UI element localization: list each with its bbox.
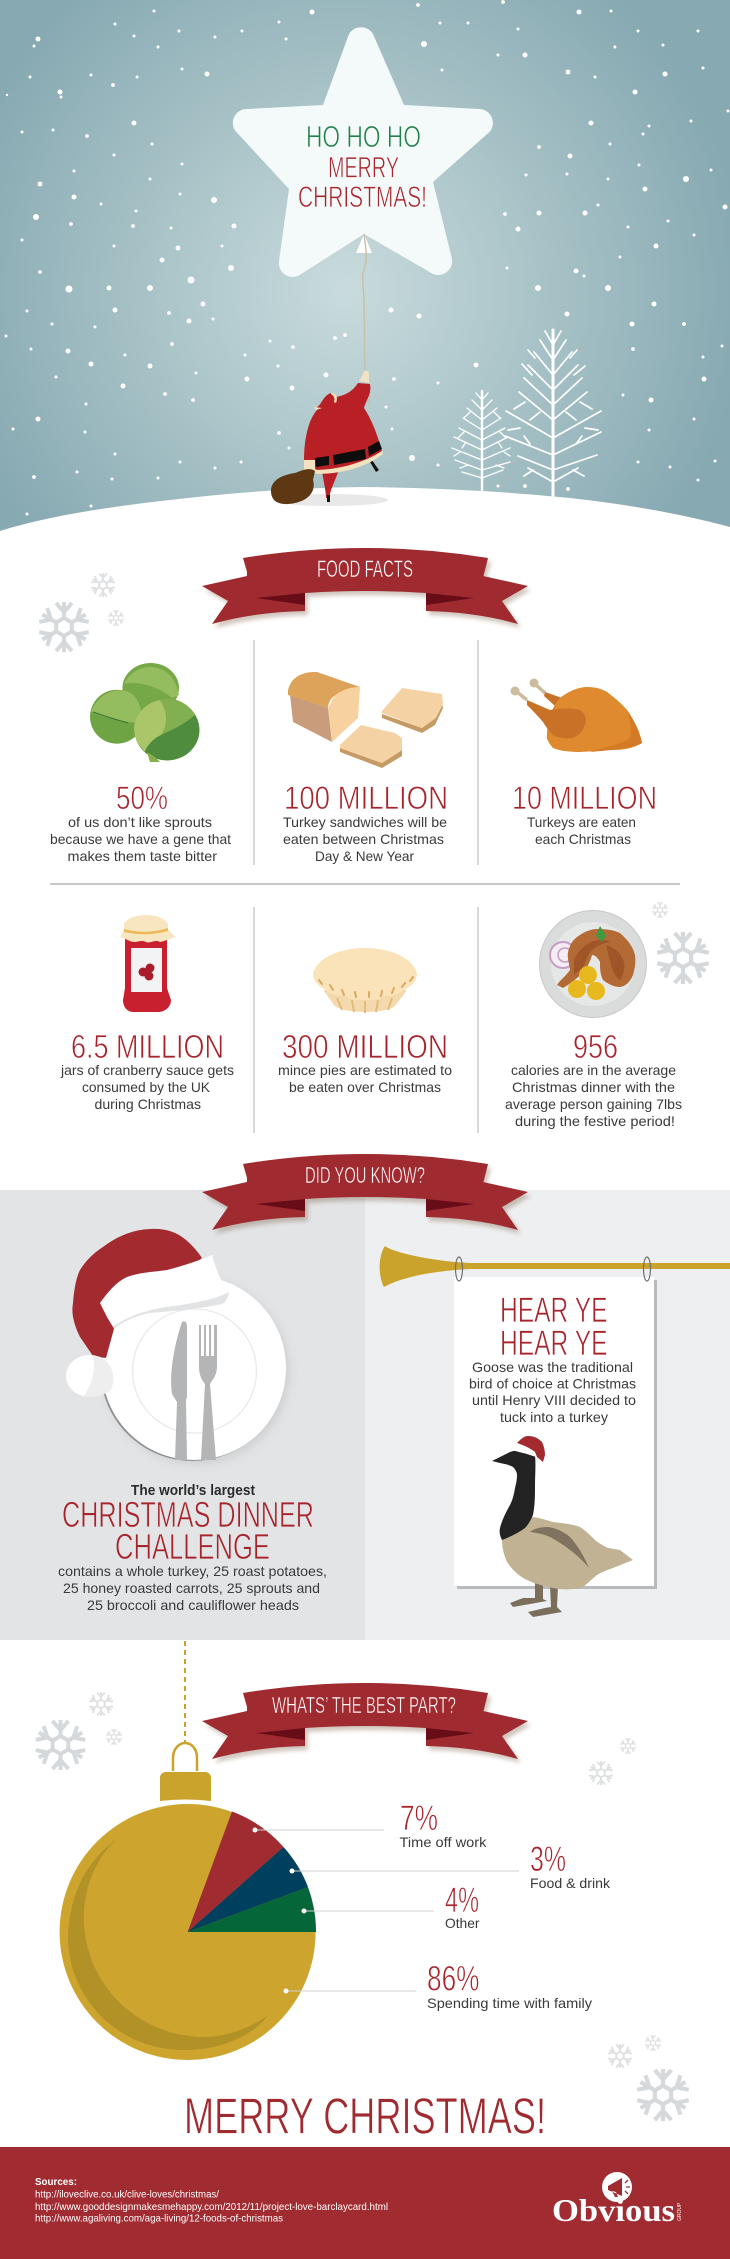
ornament cap	[160, 1772, 211, 1801]
icon: dinner plate	[540, 910, 646, 1018]
stat: 6.5 million: 6.5 MILLION	[71, 1028, 224, 1065]
panel: food fact grid	[50, 640, 682, 1133]
legend: 7% time off work	[400, 1799, 488, 1850]
legend: 3% food and drink	[530, 1840, 611, 1891]
description: of us don’t like sprouts	[68, 814, 212, 830]
description: during Christmas	[94, 1096, 201, 1112]
legend: 3% food and drink: 3%	[530, 1840, 566, 1879]
panel: did you know right	[365, 1190, 730, 1640]
legend: 86% spending time with family	[427, 1960, 592, 2011]
snowflakes: lower section	[35, 1692, 690, 2121]
snowflakes: right of plate	[652, 902, 710, 984]
text: MERRY: MERRY	[328, 152, 399, 184]
logo: Obvious: Obvious	[552, 2192, 675, 2228]
description: jars of cranberry sauce gets	[60, 1062, 234, 1078]
legs	[510, 1579, 547, 1607]
ornament shading	[68, 1840, 268, 2050]
description: calories are in the average	[511, 1062, 676, 1078]
star shape	[233, 27, 493, 277]
description: makes them taste bitter	[68, 848, 217, 864]
small tree	[452, 391, 510, 491]
description: Day & New Year	[315, 848, 414, 864]
coat trim	[313, 451, 383, 474]
slice: 3% food and drink	[188, 1847, 308, 1932]
description: tuck into a turkey	[500, 1409, 608, 1425]
stat: 50%: 50%	[116, 780, 168, 816]
description: 25 honey roasted carrots, 25 sprouts and	[63, 1580, 320, 1596]
hat	[72, 1229, 202, 1358]
hood	[315, 393, 336, 409]
heading: Hear ye	[500, 1291, 608, 1363]
text: The world's largest: The world’s largest	[131, 1483, 255, 1499]
description: until Henry VIII decided to	[472, 1392, 636, 1408]
balloon string	[363, 234, 370, 406]
hat	[517, 1436, 545, 1462]
sources: http://www.agaliving.com/aga-living/12-foods-of-christmas	[35, 2212, 283, 2224]
chart: ornament pie	[60, 1743, 316, 2060]
legend: 4% other: Other	[445, 1915, 480, 1931]
description: bird of choice at Christmas	[469, 1376, 636, 1392]
heading: Christmas dinner challenge	[62, 1494, 314, 1567]
sack	[271, 469, 315, 504]
background	[365, 1190, 730, 1640]
pie base: 86% spending time with family	[60, 1804, 316, 2060]
plate	[102, 1276, 286, 1460]
glove and cuff	[359, 370, 369, 383]
fact: turkeys	[510, 678, 657, 847]
legs	[322, 470, 339, 498]
ornament chain	[184, 1641, 186, 1742]
fact: calories	[505, 910, 682, 1129]
ribbon heading: did you know	[202, 1154, 531, 1234]
panel: snowy sky hero	[0, 0, 730, 540]
text: FOOD FACTS: FOOD FACTS	[317, 556, 413, 583]
stat: 300 million: 300 MILLION	[282, 1028, 448, 1065]
grid lines	[254, 640, 478, 1133]
logo: Obvious	[552, 2172, 683, 2228]
icon: mince pie	[313, 948, 417, 1013]
icon: brussels sprouts	[90, 663, 200, 762]
description: each Christmas	[535, 831, 631, 847]
hat pompom	[66, 1355, 114, 1397]
description: average person gaining 7lbs	[505, 1096, 682, 1112]
belt	[315, 441, 382, 467]
panel: did you know left	[0, 1190, 365, 1640]
sources	[35, 2176, 388, 2224]
icon: Santa pulling sack	[271, 370, 388, 506]
neck and head	[492, 1450, 535, 1540]
description: because we have a gene that	[50, 831, 231, 847]
legend: 7% time off work: Time off work	[400, 1834, 488, 1850]
plate shadow	[105, 1280, 289, 1464]
hat brim	[100, 1255, 233, 1327]
legend: 4% other	[445, 1881, 480, 1931]
slice: 7% time off work	[188, 1812, 284, 1932]
stat: 100 million: 100 MILLION	[284, 780, 448, 816]
sources: http://iloveclive.co.uk/clive-loves/christmas/	[35, 2188, 219, 2200]
banner rings	[456, 1257, 650, 1281]
icon: goose in santa hat	[492, 1436, 633, 1617]
heading: Hear ye: HEAR YE	[500, 1291, 608, 1330]
icon: herald trumpet	[380, 1246, 730, 1287]
description: Turkeys are eaten	[527, 814, 636, 830]
icon: jam jar	[120, 915, 176, 1012]
icon: bare white trees	[452, 330, 601, 497]
knife	[171, 1321, 187, 1460]
description: consumed by the UK	[82, 1079, 211, 1095]
heading: Hear ye: HEAR YE	[500, 1324, 608, 1363]
text: WHATS' THE BEST PART?: WHATS’ THE BEST PART?	[272, 1692, 456, 1718]
coat	[304, 383, 382, 472]
sky background	[0, 0, 730, 540]
big tree	[505, 330, 601, 497]
legend: 86% spending time with family: Spending time with family	[427, 1995, 592, 2011]
description: during the festive period!	[515, 1113, 675, 1129]
star knot	[356, 234, 372, 253]
icon: plate with cutlery and santa hat	[66, 1229, 289, 1464]
heading: Merry Christmas: MERRY CHRISTMAS!	[184, 2088, 546, 2144]
heading: Christmas dinner challenge: CHRISTMAS DINNER	[62, 1494, 314, 1535]
fact: cranberry sauce	[60, 915, 234, 1112]
text: DID YOU KNOW?: DID YOU KNOW?	[305, 1162, 425, 1188]
ribbon heading: whats the best part	[202, 1683, 531, 1763]
description: contains a whole turkey, 25 roast potatoes,	[58, 1563, 327, 1579]
description: eaten between Christmas	[283, 831, 444, 847]
description: Turkey sandwiches will be	[283, 814, 447, 830]
snowflakes: upper left	[38, 573, 124, 652]
sources: Sources:	[35, 2176, 77, 2188]
legend: 7% time off work: 7%	[400, 1799, 438, 1838]
stat: 956: 956	[573, 1028, 618, 1065]
fact: sandwiches	[283, 672, 448, 864]
icon: roast turkey	[510, 678, 642, 752]
chart leader lines	[252, 1828, 519, 1994]
ground shadow	[272, 494, 388, 506]
wing	[530, 1527, 589, 1568]
logo: Obvious: GROUP	[677, 2202, 683, 2221]
icon: star balloon with greeting	[233, 27, 493, 277]
ornament loop	[173, 1743, 197, 1771]
panel: footer	[0, 2147, 730, 2259]
snowy hill	[0, 487, 730, 540]
heading: Christmas dinner challenge: CHALLENGE	[115, 1526, 270, 1567]
ribbon heading: food facts	[202, 548, 531, 628]
legend: 86% spending time with family: 86%	[427, 1960, 480, 1998]
description: Goose was the traditional	[472, 1359, 633, 1375]
background	[0, 1190, 365, 1640]
description: be eaten over Christmas	[289, 1079, 441, 1095]
fact: mince pies	[278, 948, 452, 1095]
stat: 10 million: 10 MILLION	[512, 780, 657, 816]
slice: 4% other	[188, 1887, 316, 1932]
description: mince pies are estimated to	[278, 1062, 452, 1078]
scroll banner	[454, 1277, 657, 1589]
fork	[199, 1325, 217, 1460]
fact: sprouts	[50, 663, 231, 864]
description: Christmas dinner with the	[512, 1079, 675, 1095]
icon: bread loaf and slices	[288, 672, 443, 768]
footer background	[0, 2147, 730, 2259]
legend: 3% food and drink: Food & drink	[530, 1875, 611, 1891]
sources: http://www.gooddesignmakesmehappy.com/2012/11/project-love-barclaycard.html	[35, 2201, 388, 2213]
legend: 4% other: 4%	[445, 1881, 479, 1920]
falling snow	[4, 0, 730, 516]
text: CHRISTMAS!: CHRISTMAS!	[298, 181, 427, 214]
sleeve cuff	[304, 460, 315, 470]
text: HO HO HO: HO HO HO	[306, 119, 421, 154]
description: 25 broccoli and cauliflower heads	[87, 1597, 299, 1613]
body	[502, 1517, 633, 1589]
